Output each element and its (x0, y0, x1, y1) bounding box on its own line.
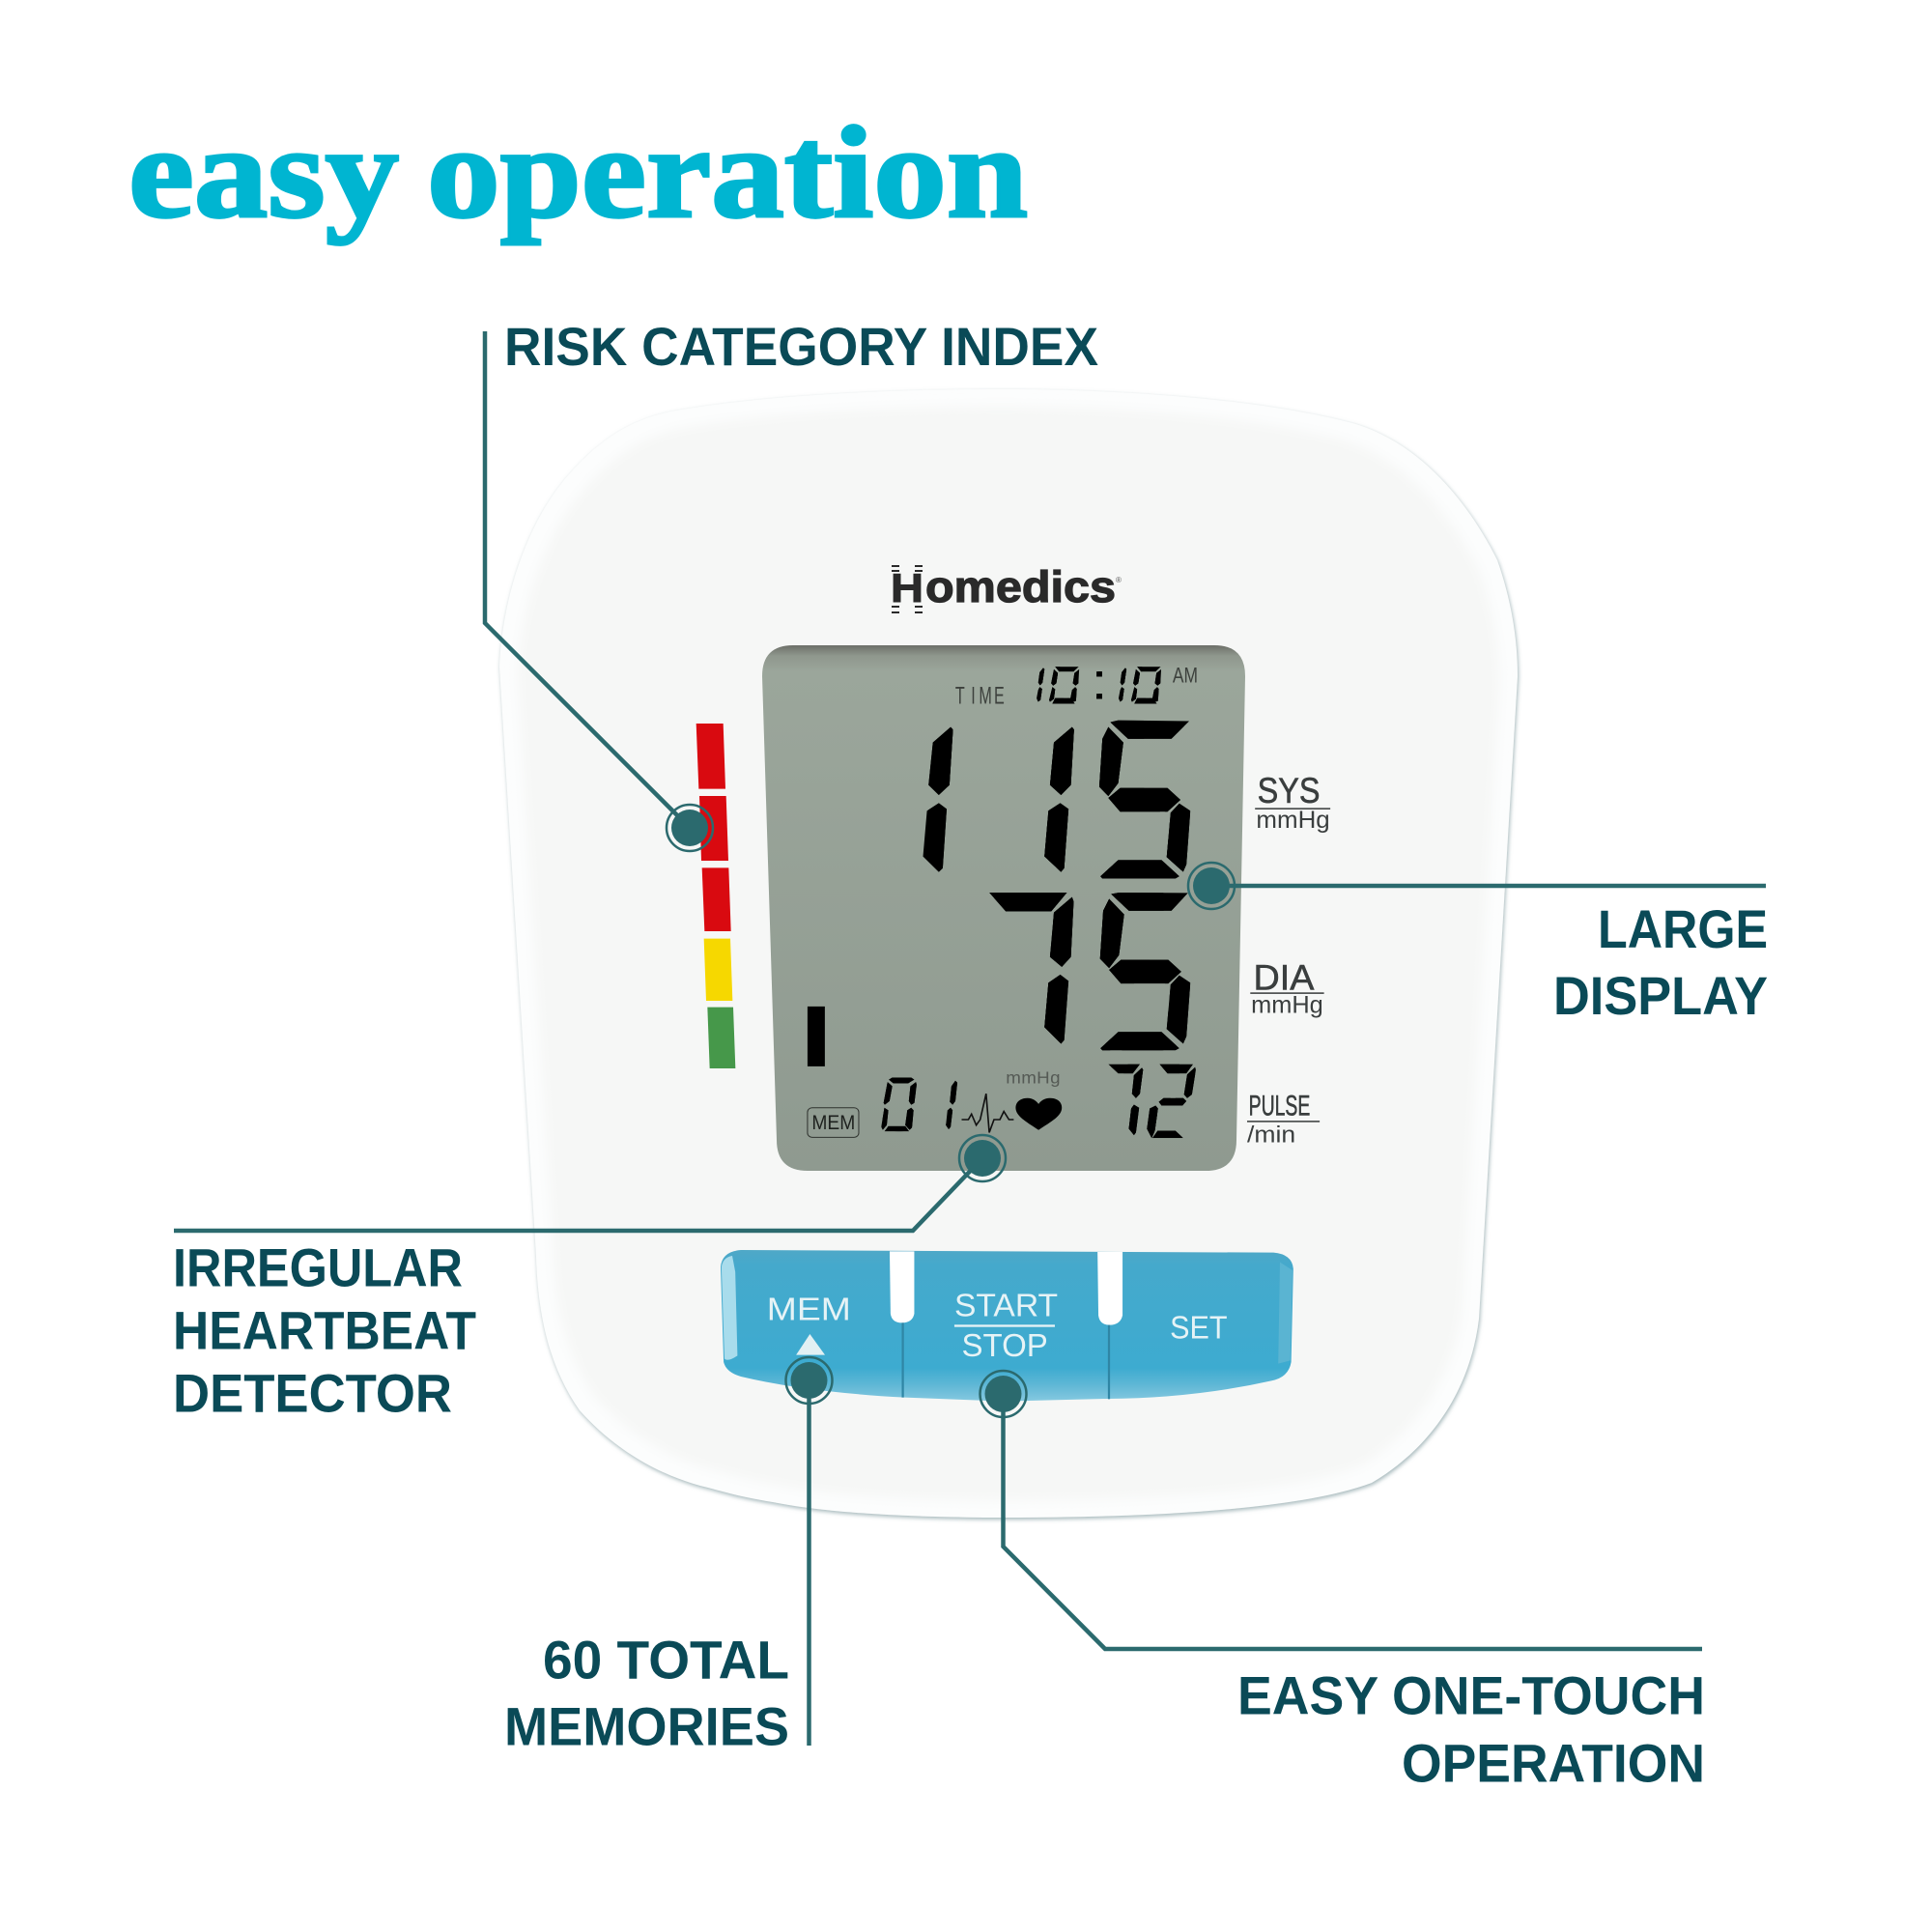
title (128, 100, 1028, 245)
START/STOP button label: STOP (962, 1327, 1048, 1364)
callout: risk category index: RISK CATEGORY INDEX (504, 316, 1098, 377)
systolic reading: 115 (873, 678, 1209, 926)
Homedics logo: H (891, 565, 923, 611)
SET button label: SET (1170, 1310, 1228, 1346)
MEM button label (767, 1292, 851, 1355)
Homedics logo: omedics (925, 562, 1116, 611)
LCD display (762, 645, 1245, 1171)
DIA label (1250, 957, 1324, 1018)
Homedics logo: ® (1116, 576, 1122, 584)
monitor body (499, 389, 1518, 1518)
callout: 60 total memories: MEMORIES (504, 1696, 789, 1756)
callout: risk category index (485, 316, 1098, 851)
LCD readings (808, 657, 1330, 1160)
callout: 60 total memories (504, 1357, 833, 1756)
blood pressure monitor (499, 389, 1518, 1518)
memory badge (808, 1108, 859, 1137)
callout: large display: DISPLAY (1553, 965, 1768, 1026)
clock reading: 10:10 (1026, 657, 1163, 715)
callout: irregular heartbeat detector: DETECTOR (173, 1362, 452, 1424)
DIA label: DIA (1254, 957, 1315, 998)
SYS label: mmHg (1256, 806, 1330, 834)
pulse reading: 72 (1097, 1045, 1204, 1160)
AM label: AM (1173, 663, 1198, 687)
callout: 60 total memories: 60 TOTAL (543, 1629, 789, 1690)
callout: irregular heartbeat detector: HEARTBEAT (173, 1300, 476, 1360)
callout: irregular heartbeat detector (173, 1135, 1006, 1424)
callout: large display (1188, 863, 1768, 1026)
risk level bar (808, 1007, 825, 1066)
START/STOP button label (954, 1288, 1058, 1364)
diastolic reading: 75 (980, 850, 1209, 1098)
memory badge: MEM (811, 1111, 855, 1134)
heartbeat trace (962, 1094, 1013, 1132)
mmHg label on LCD: mmHg (1006, 1068, 1061, 1087)
START/STOP button label: START (954, 1288, 1058, 1323)
heart icon (1015, 1098, 1062, 1130)
callout: easy one-touch operation: EASY ONE-TOUCH (1237, 1665, 1705, 1725)
title: easy (128, 100, 399, 245)
time label: TIME (955, 683, 1005, 709)
DIA label: mmHg (1251, 990, 1323, 1018)
callout: easy one-touch operation: OPERATION (1402, 1733, 1705, 1793)
SYS label: SYS (1258, 771, 1321, 811)
callout: irregular heartbeat detector: IRREGULAR (173, 1236, 463, 1298)
title: operation (427, 100, 1028, 245)
buttons (721, 1250, 1293, 1402)
MEM button label: MEM (767, 1292, 851, 1327)
callout: large display: LARGE (1598, 898, 1768, 959)
risk category colour bars (696, 724, 735, 1068)
memory number: 01 (877, 1065, 975, 1148)
PULSE label: PULSE (1249, 1089, 1310, 1122)
callout: easy one-touch operation (980, 1371, 1705, 1793)
PULSE label (1247, 1089, 1320, 1149)
PULSE label: /min (1247, 1122, 1295, 1149)
SYS label (1255, 771, 1330, 834)
